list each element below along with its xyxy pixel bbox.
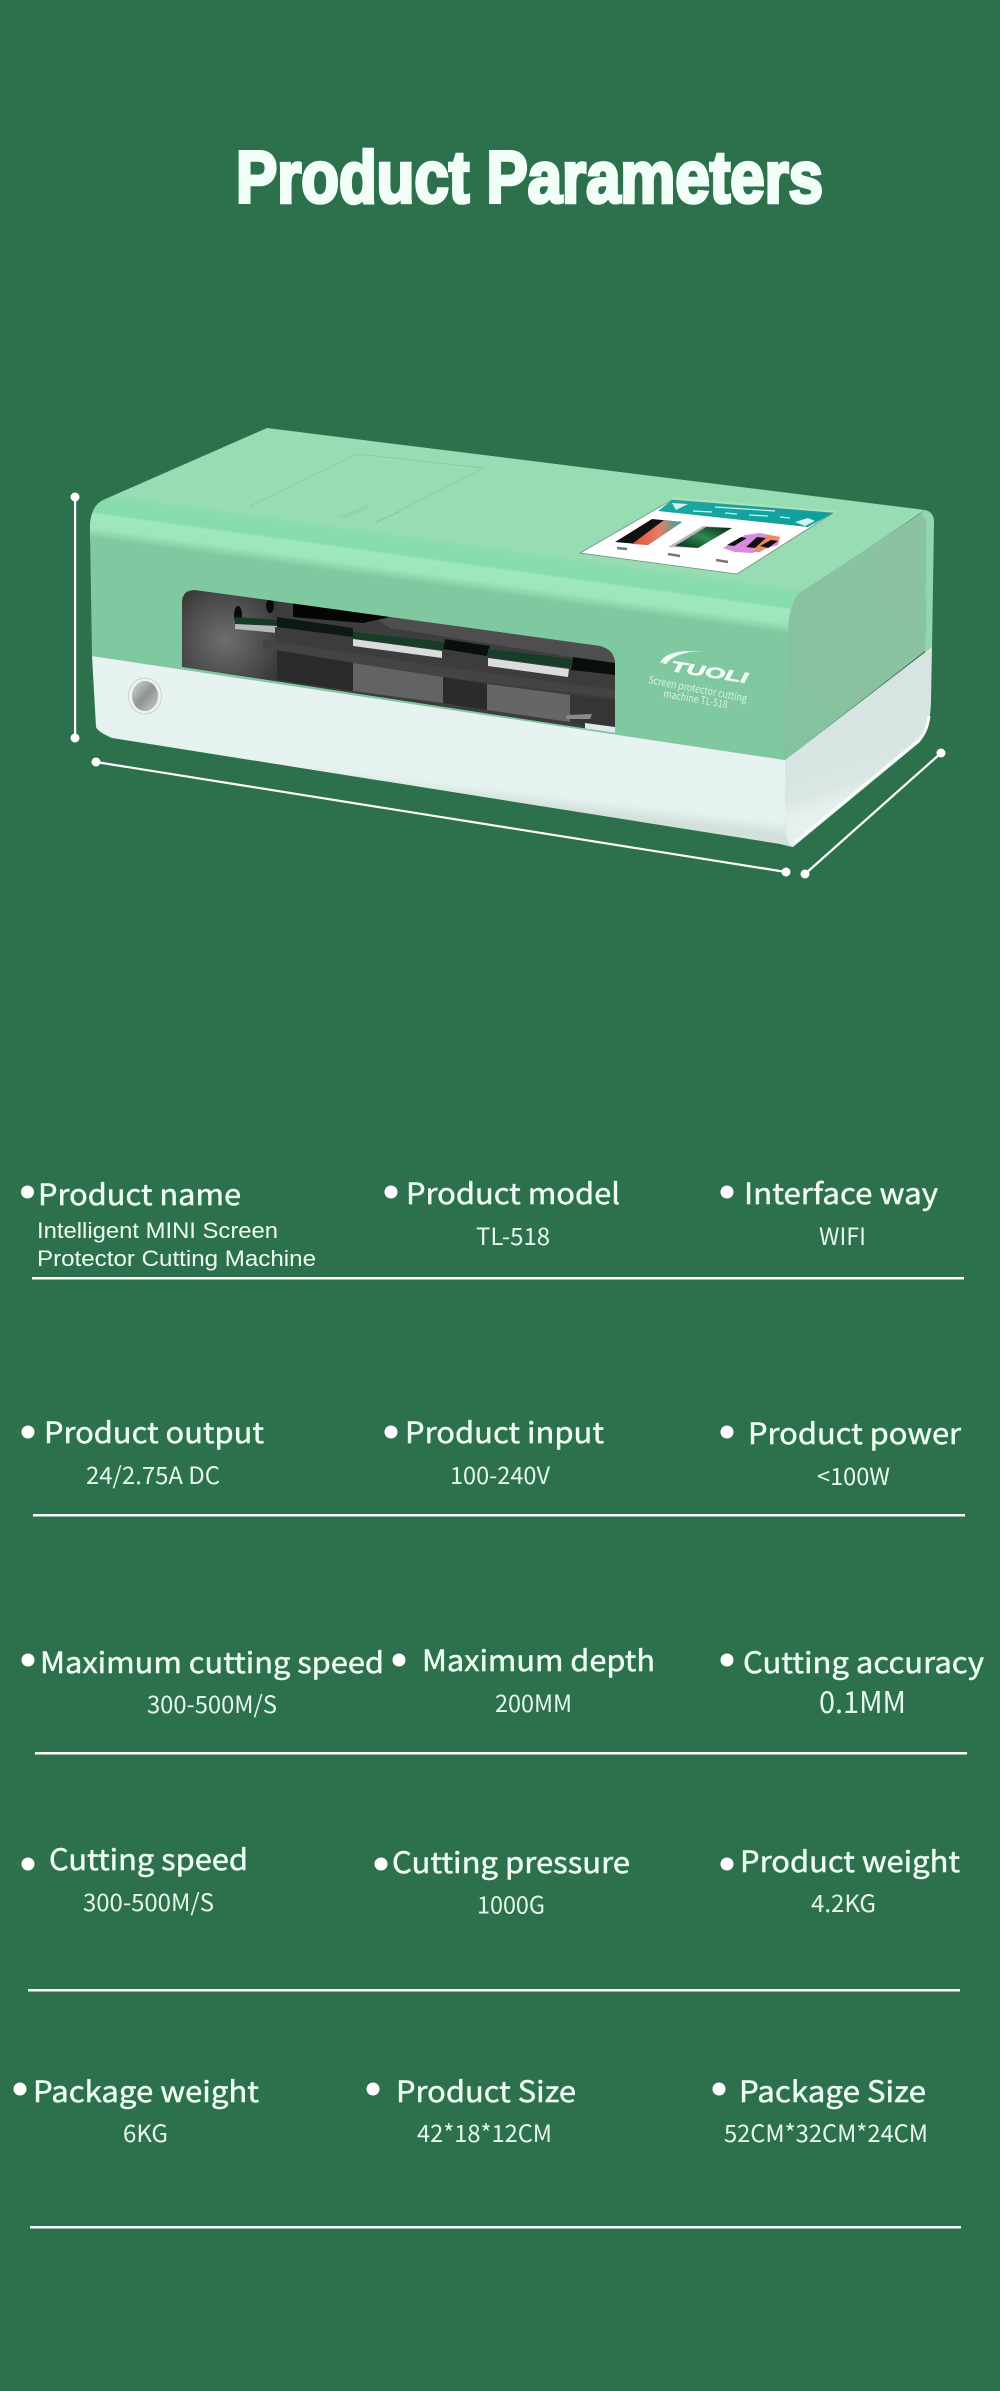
parameter: product power: Product power [748, 1411, 962, 1453]
parameter: product size: Product Size [396, 2069, 576, 2111]
parameter: product input: 100-240V [450, 1456, 550, 1491]
parameter: product model [384, 1171, 620, 1252]
parameter: cutting pressure [374, 1840, 630, 1920]
top lid outline [250, 454, 483, 523]
phone 3 cluster [723, 533, 780, 553]
machine side panel [785, 514, 926, 760]
parameter: product name: Product name [38, 1172, 241, 1214]
parameter: product name: Protector Cutting Machine [37, 1246, 316, 1271]
parameter row 3 [22, 1638, 984, 1722]
parameter: cutting accuracy: Cutting accuracy [743, 1640, 984, 1682]
phone 2 [668, 526, 732, 548]
touch screen [580, 497, 838, 574]
parameter row 4 [22, 1837, 960, 1920]
logo caption line 1: Screen protector cutting [647, 672, 748, 706]
screen bezel highlight [672, 497, 838, 515]
parameter: maximum cutting speed: Maximum cutting speed [40, 1640, 384, 1682]
white base front [92, 656, 792, 847]
machine top surface [90, 428, 925, 636]
parameter: product weight: 4.2KG [811, 1884, 876, 1919]
parameter: cutting accuracy [720, 1640, 984, 1722]
parameter: package size: Package Size [739, 2069, 926, 2111]
parameter row 2 [22, 1410, 962, 1492]
dimension: height [70, 492, 80, 742]
screen display [580, 500, 833, 574]
parameter: product power: <100W [817, 1457, 890, 1492]
parameter: product weight: Product weight [740, 1839, 960, 1881]
parameter: product power [720, 1411, 962, 1492]
parameter: product input [384, 1410, 604, 1491]
white base rim [795, 716, 929, 842]
cutting window [182, 590, 615, 735]
parameter: cutting speed [22, 1837, 248, 1918]
parameter: product size: 42*18*12CM [417, 2114, 552, 2149]
logo swoosh [660, 651, 703, 664]
parameter row 1 [21, 1171, 938, 1271]
parameter: product model: Product model [406, 1171, 620, 1213]
parameter: cutting pressure: Cutting pressure [392, 1840, 630, 1882]
parameter: cutting accuracy: 0.1MM [819, 1678, 906, 1722]
power button [128, 678, 162, 714]
parameter: package weight [14, 2069, 259, 2149]
parameter: maximum cutting speed: 300-500M/S [147, 1685, 277, 1720]
parameter: product name [21, 1172, 316, 1271]
parameter: cutting pressure: 1000G [477, 1886, 545, 1920]
parameter: interface way: WIFI [819, 1217, 866, 1252]
phone 1 [615, 519, 682, 545]
logo caption line 2: machine TL-518 [662, 686, 729, 712]
brand logo [647, 651, 750, 712]
parameter: package weight: Package weight [33, 2069, 259, 2111]
parameter: cutting speed: Cutting speed [49, 1837, 248, 1879]
screen label marks [617, 548, 728, 562]
parameter: interface way: Interface way [744, 1171, 938, 1213]
machine front face [90, 530, 789, 760]
parameter: product input: Product input [405, 1410, 604, 1452]
parameter: maximum depth: 200MM [495, 1684, 572, 1719]
parameter: product output [22, 1410, 264, 1491]
parameter: product output: Product output [44, 1410, 264, 1452]
white base side [785, 647, 932, 847]
parameter: product model: TL-518 [476, 1217, 550, 1252]
parameter: maximum cutting speed [22, 1640, 384, 1720]
parameter: maximum depth: Maximum depth [422, 1638, 655, 1680]
title: Product Parameters [236, 136, 823, 218]
dimension: length [92, 758, 790, 876]
parameter: package size: 52CM*32CM*24CM [724, 2114, 928, 2149]
parameter: package size [712, 2069, 928, 2149]
parameter: product output: 24/2.75A DC [86, 1456, 220, 1491]
header icon and marks [672, 503, 815, 526]
product illustration: cutting machine [90, 428, 934, 847]
parameter: cutting speed: 300-500M/S [83, 1883, 214, 1918]
side rim [920, 510, 934, 652]
screen teal header [658, 500, 833, 527]
parameter: product size [366, 2069, 576, 2149]
parameter: product weight [720, 1839, 960, 1919]
parameter: interface way [720, 1171, 938, 1252]
logo wordmark: TUOLI [669, 658, 750, 687]
parameter row 5 [14, 2069, 928, 2149]
parameter: maximum depth [392, 1638, 655, 1719]
parameter: product name: Intelligent MINI Screen [37, 1218, 278, 1243]
parameter: package weight: 6KG [123, 2114, 168, 2149]
dimension: width [800, 748, 946, 878]
